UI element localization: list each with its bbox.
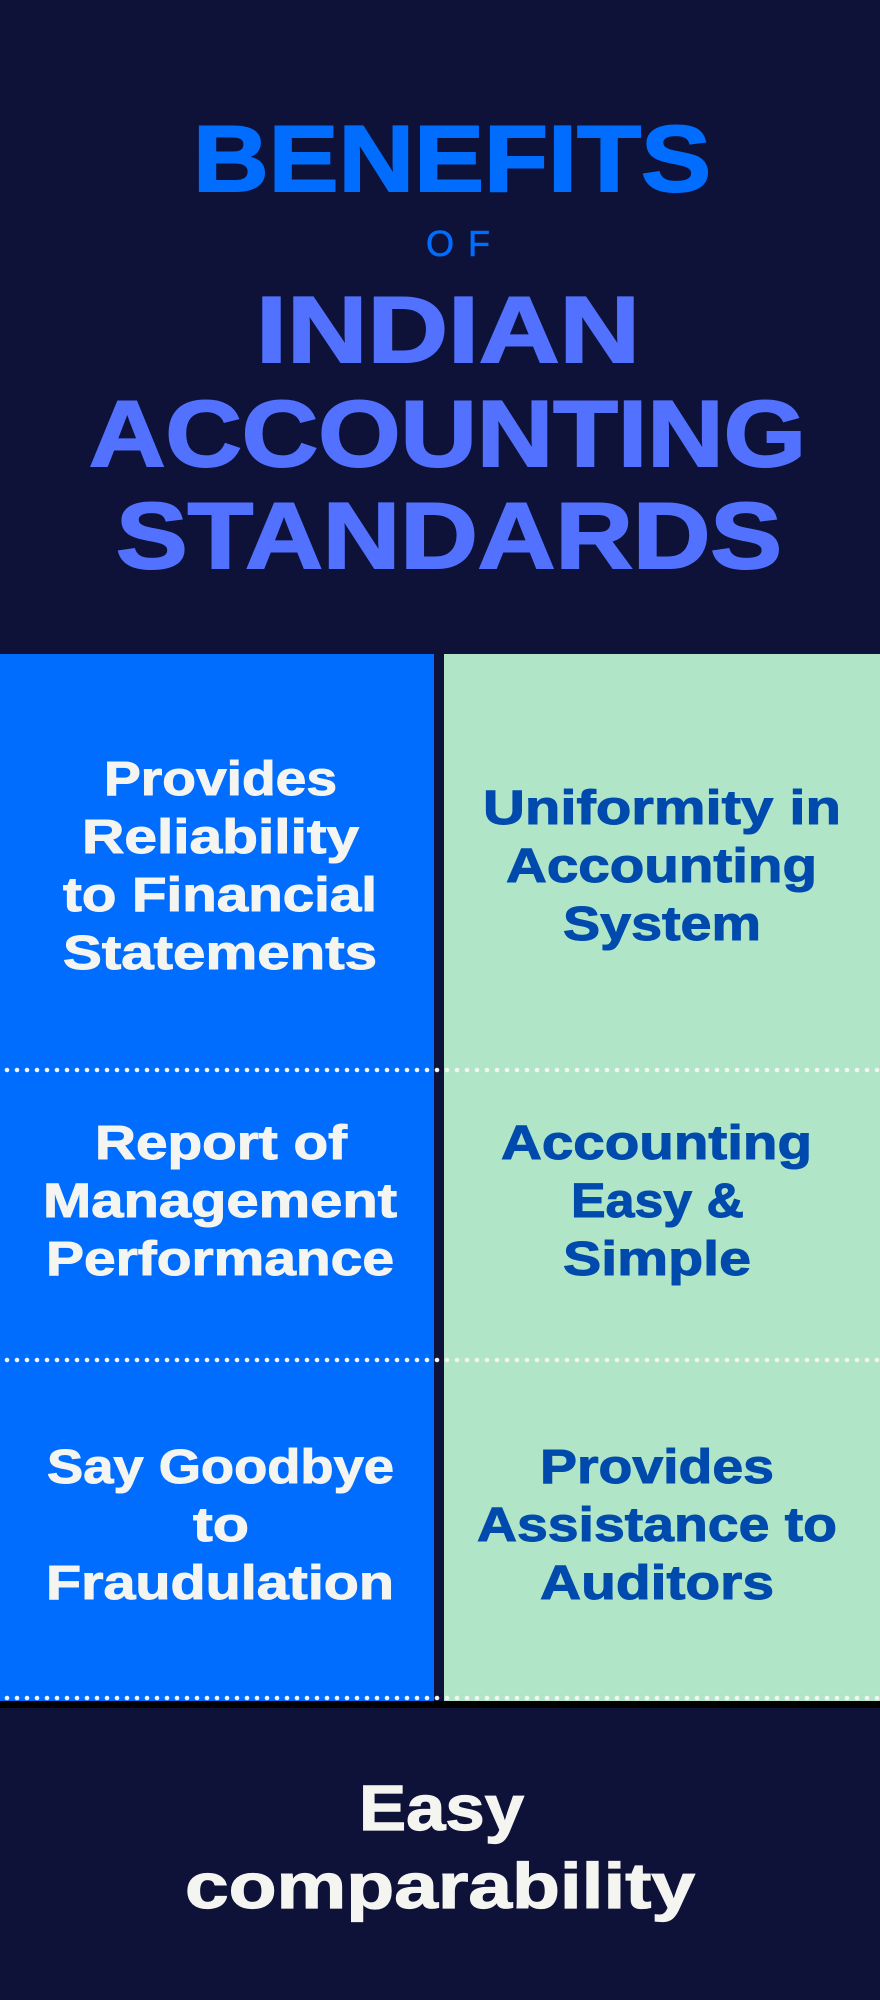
- panel: right mint column: [444, 654, 880, 1701]
- footer: easy comparability: comparability: [185, 1850, 695, 1922]
- footer: easy comparability: [185, 1772, 695, 1922]
- benefit: reliability: [63, 753, 377, 980]
- benefit: auditors: Provides: [540, 1441, 774, 1494]
- title: [89, 106, 806, 588]
- benefit: reliability: Reliability: [82, 811, 359, 864]
- benefit: uniformity: System: [563, 898, 761, 951]
- subheading: of: OF: [426, 223, 490, 264]
- benefit: auditors: [477, 1441, 837, 1610]
- benefit: easy and simple: Easy &: [571, 1175, 744, 1228]
- benefit: reliability: Statements: [63, 927, 377, 980]
- benefit: fraud: to: [193, 1499, 249, 1552]
- benefit: fraud: Fraudulation: [46, 1557, 394, 1610]
- benefit: management performance: Management: [43, 1175, 397, 1228]
- benefit: auditors: Auditors: [540, 1557, 774, 1610]
- benefit: fraud: Say Goodbye: [47, 1441, 394, 1494]
- dotted row dividers: [7, 1070, 880, 1698]
- benefit: easy and simple: Simple: [563, 1233, 751, 1286]
- heading: accounting: ACCOUNTING: [89, 381, 806, 486]
- heading: indian: INDIAN: [256, 277, 640, 382]
- benefit: reliability: to Financial: [63, 869, 377, 922]
- benefit: uniformity: Accounting: [506, 840, 817, 893]
- heading: standards: STANDARDS: [116, 483, 782, 588]
- benefit: uniformity: Uniformity in: [483, 782, 841, 835]
- footer: easy comparability: Easy: [359, 1772, 524, 1844]
- benefit: fraud: [46, 1441, 394, 1610]
- benefit: reliability: Provides: [104, 753, 337, 806]
- benefit: easy and simple: [501, 1117, 812, 1286]
- benefit: management performance: Performance: [46, 1233, 394, 1286]
- heading: benefits: BENEFITS: [193, 106, 711, 211]
- benefit: uniformity: [483, 782, 841, 951]
- benefit: auditors: Assistance to: [477, 1499, 837, 1552]
- panel: left blue column: [0, 654, 434, 1701]
- benefit: management performance: Report of: [95, 1117, 348, 1170]
- benefit: management performance: [43, 1117, 397, 1286]
- bottom black band: [0, 1701, 880, 1708]
- benefit: easy and simple: Accounting: [501, 1117, 812, 1170]
